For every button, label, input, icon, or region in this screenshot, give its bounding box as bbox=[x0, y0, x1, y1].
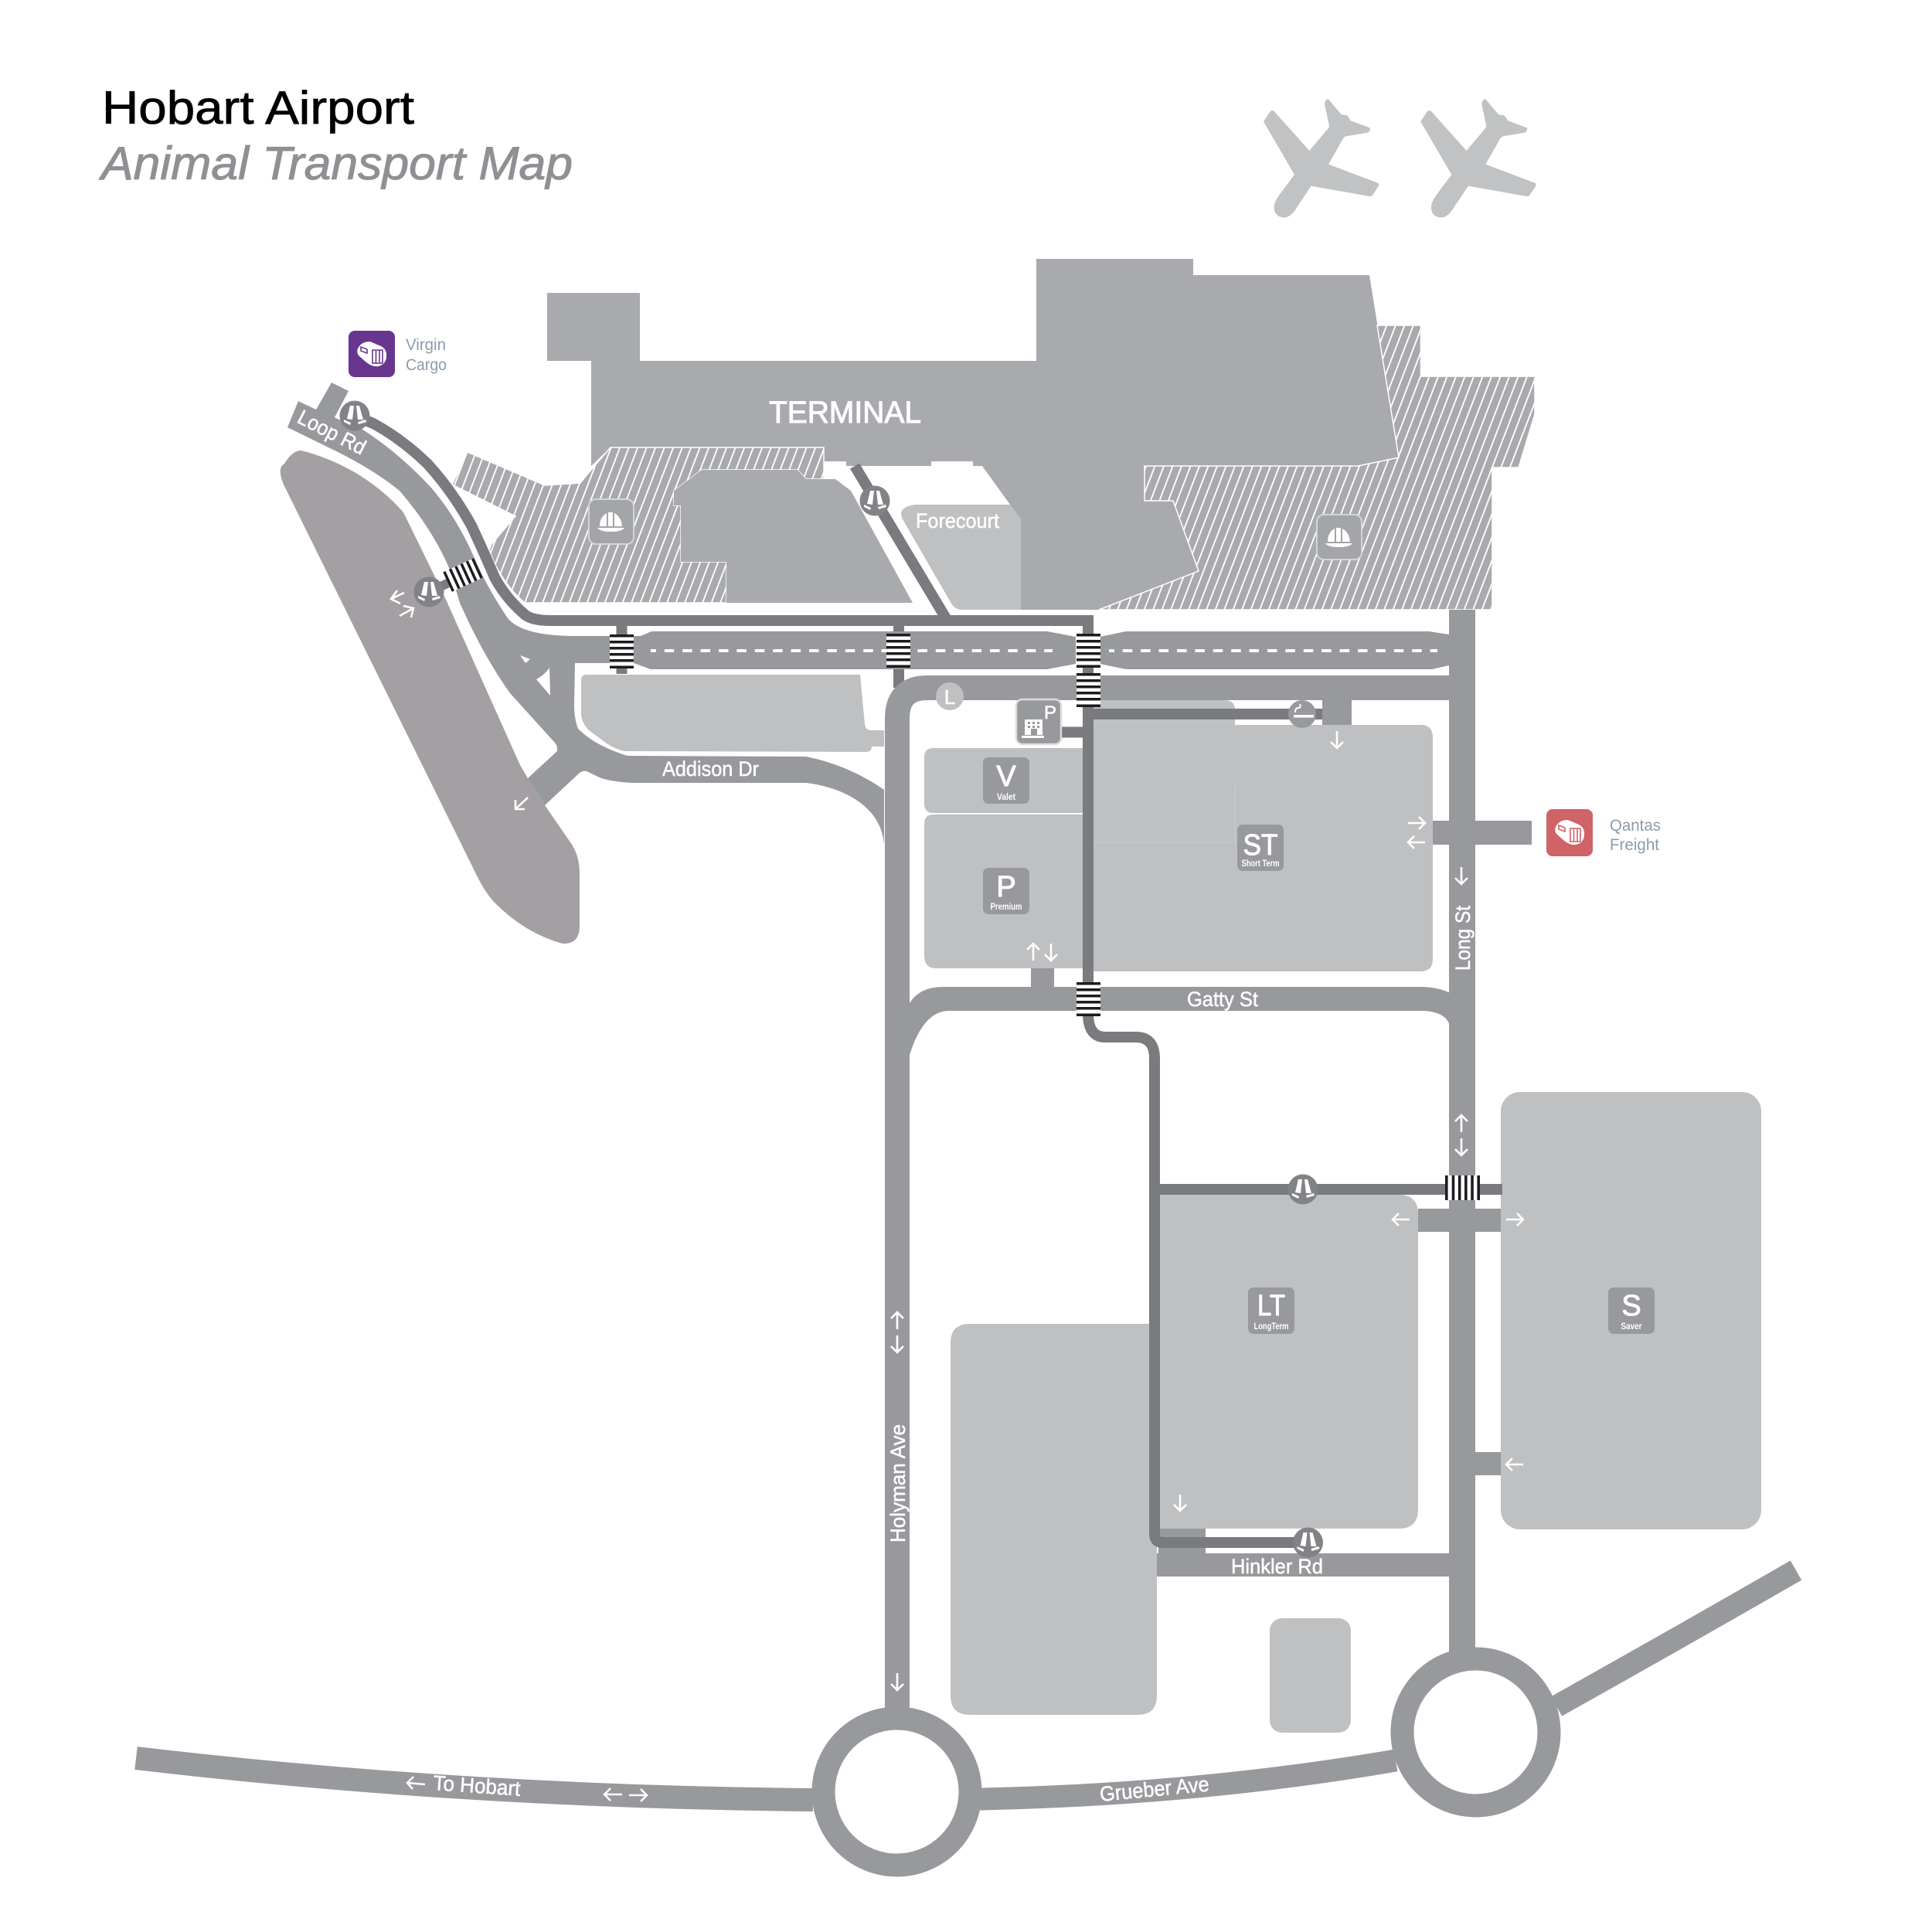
lot: saver bbox=[1501, 1092, 1761, 1529]
icon: hotel parking bbox=[1016, 699, 1061, 744]
road: premium connector bbox=[1031, 968, 1054, 987]
parking sign: short term: ST bbox=[1243, 829, 1278, 862]
virgin cargo: Cargo bbox=[406, 356, 447, 374]
road: hinkler stub bbox=[1158, 1529, 1206, 1553]
pedestrian walkways bbox=[355, 416, 1502, 1543]
inner building bbox=[674, 470, 913, 603]
parking sign: valet bbox=[983, 757, 1029, 804]
walkway: main route bbox=[355, 416, 1306, 1543]
walkway: long term branch bbox=[1155, 1184, 1502, 1195]
arrow: long st up bbox=[1455, 1115, 1468, 1132]
arrow: long term exit bbox=[1174, 1495, 1186, 1511]
parking sign: saver: S bbox=[1621, 1290, 1641, 1322]
label: to hobart: To Hobart bbox=[433, 1771, 522, 1801]
icon: virgin cargo container bbox=[349, 331, 395, 377]
median dashes bbox=[651, 649, 1437, 652]
crossing: west bbox=[610, 634, 634, 668]
lot: premium bbox=[924, 815, 1083, 968]
car parks bbox=[581, 675, 1761, 1733]
arrow: premium down bbox=[1045, 944, 1057, 961]
arrow: long term entry bbox=[1393, 1213, 1410, 1226]
parking sign: long term: LT bbox=[1257, 1290, 1285, 1322]
construction zone right bbox=[1099, 325, 1535, 610]
arrow: hobart road right bbox=[629, 1789, 647, 1801]
road: qantas connector bbox=[1433, 821, 1532, 845]
parking sign: short term bbox=[1237, 825, 1284, 871]
pedestrian markers bbox=[340, 400, 1323, 1558]
construction zone left bbox=[452, 447, 824, 603]
arrow: to hobart left bbox=[407, 1777, 425, 1789]
label: gatty st: Gatty St bbox=[1187, 988, 1258, 1011]
arrow: long st down bbox=[1455, 867, 1468, 884]
road: east exit bbox=[1556, 1570, 1796, 1706]
title block bbox=[99, 82, 573, 189]
crossing: centre bbox=[886, 634, 910, 668]
roundabout east bbox=[1402, 1658, 1549, 1805]
arrow: short term right bbox=[1408, 817, 1425, 829]
traffic arrows bbox=[391, 590, 1523, 1801]
road: loop spur bbox=[316, 383, 349, 419]
walkway: terminal branch bbox=[855, 466, 946, 618]
walkway: zebra link 2 bbox=[893, 621, 904, 688]
parking sign: premium: Premium bbox=[991, 901, 1022, 912]
qantas freight label: Qantas bbox=[1610, 817, 1661, 835]
arrow: lot west one bbox=[391, 590, 404, 604]
parking sign: short term: Short Term bbox=[1241, 858, 1280, 869]
icon: airplane left bbox=[1264, 99, 1379, 218]
road: short term connector bbox=[1322, 700, 1352, 725]
walkway: west stub bbox=[429, 581, 452, 592]
qantas freight: Freight bbox=[1610, 836, 1659, 854]
label: long st: Long St bbox=[1451, 906, 1475, 971]
walkway: zebra link 1 bbox=[617, 621, 628, 674]
walkway: short term branch bbox=[1094, 709, 1322, 719]
hat right bbox=[1317, 515, 1362, 560]
arrow: long st lower down bbox=[1455, 1138, 1468, 1155]
parking sign: long term: LongTerm bbox=[1253, 1321, 1289, 1332]
arrow: short term left bbox=[1408, 836, 1425, 849]
arrow: premium up bbox=[1027, 944, 1039, 961]
terminal label: TERMINAL bbox=[769, 396, 921, 430]
arrow: holyman up bbox=[891, 1312, 903, 1329]
parking sign: saver bbox=[1608, 1287, 1655, 1334]
arrow: saver exit bbox=[1506, 1458, 1523, 1471]
lot: addison bbox=[581, 675, 884, 752]
qantas freight bbox=[1546, 809, 1661, 856]
marker: loop road top bbox=[340, 400, 369, 431]
terminal building bbox=[547, 259, 1399, 610]
road: gatty st bbox=[910, 987, 1451, 1055]
icon: hotel parking: P bbox=[1044, 702, 1056, 723]
roundabout west bbox=[824, 1719, 971, 1866]
hat left bbox=[589, 499, 634, 544]
marker: long term bottom bbox=[1293, 1527, 1323, 1558]
arrow: lot west two bbox=[400, 606, 413, 617]
arrow: lot west entry bbox=[515, 798, 528, 809]
forecourt label: Forecourt bbox=[916, 509, 999, 532]
road: saver lower entry bbox=[1475, 1452, 1501, 1475]
parking sign: premium: P bbox=[996, 871, 1016, 903]
label: addison dr: Addison Dr bbox=[662, 757, 759, 781]
lot: valet bbox=[924, 748, 1083, 813]
road: long st bbox=[1449, 610, 1475, 1661]
arrow: holyman down bbox=[891, 1335, 903, 1352]
arrow: short term entry bbox=[1331, 731, 1343, 748]
icon: airplane right bbox=[1420, 99, 1536, 218]
road: long term and saver entry bbox=[1418, 1209, 1501, 1232]
label: loop rd: Loop Rd bbox=[294, 406, 370, 459]
virgin cargo label: Virgin bbox=[406, 336, 446, 354]
icon: smoking area bbox=[1288, 700, 1316, 728]
arrow: hobart road left bbox=[604, 1788, 622, 1801]
crossing: main upper bbox=[1077, 634, 1100, 668]
label: hinkler rd: Hinkler Rd bbox=[1231, 1555, 1323, 1578]
marker: long term top bbox=[1287, 1175, 1318, 1204]
junction islands bbox=[520, 655, 550, 696]
forecourt bbox=[901, 505, 1021, 610]
icons: construction hats bbox=[589, 499, 1362, 560]
virgin cargo bbox=[349, 331, 447, 377]
marker: loop road lot bbox=[414, 577, 444, 607]
lot: small bbox=[1270, 1618, 1351, 1733]
road network bbox=[136, 383, 1796, 1866]
road: main divided east bbox=[1100, 631, 1449, 669]
parking sign: valet: V bbox=[996, 760, 1016, 793]
parking sign: saver: Saver bbox=[1621, 1321, 1642, 1332]
road: loop road and addison drive bbox=[287, 401, 1076, 848]
icon: qantas freight container bbox=[1546, 809, 1593, 856]
crossing: main lower bbox=[1077, 673, 1100, 707]
walkway: hotel link bbox=[1062, 726, 1083, 737]
lot: short term bbox=[1094, 700, 1433, 971]
label: grueber ave: Grueber Ave bbox=[1099, 1773, 1210, 1806]
parking sign: premium bbox=[983, 868, 1029, 914]
arrow: holyman lower bbox=[891, 1673, 903, 1690]
big animal lot west bbox=[281, 451, 580, 944]
lot: long term bbox=[1158, 1195, 1418, 1529]
icon: lift: L bbox=[944, 685, 955, 709]
icon: lift bbox=[936, 682, 964, 710]
crossing: long st bbox=[1445, 1175, 1480, 1200]
crossing: gatty st bbox=[1077, 982, 1100, 1016]
pedestrian links under road bbox=[893, 621, 904, 688]
zebra crossings bbox=[443, 558, 1480, 1200]
arrow: saver entry bbox=[1506, 1213, 1523, 1226]
title: Hobart Airport bbox=[102, 82, 414, 134]
label: holyman ave: Holyman Ave bbox=[886, 1424, 910, 1543]
road: hinkler rd bbox=[1157, 1553, 1449, 1577]
subtitle: Animal Transport Map bbox=[99, 138, 573, 189]
parking sign: valet: Valet bbox=[997, 791, 1015, 802]
road: grueber ave bbox=[980, 1760, 1396, 1799]
road: holyman ave and top link bbox=[897, 688, 1449, 1712]
marker: terminal bbox=[859, 485, 890, 516]
parking sign: long term bbox=[1248, 1287, 1294, 1334]
lot: south west bbox=[951, 1324, 1157, 1715]
crossing: loop rd bbox=[443, 558, 483, 592]
road labels bbox=[294, 406, 1475, 1806]
road: to hobart bbox=[136, 1758, 813, 1800]
